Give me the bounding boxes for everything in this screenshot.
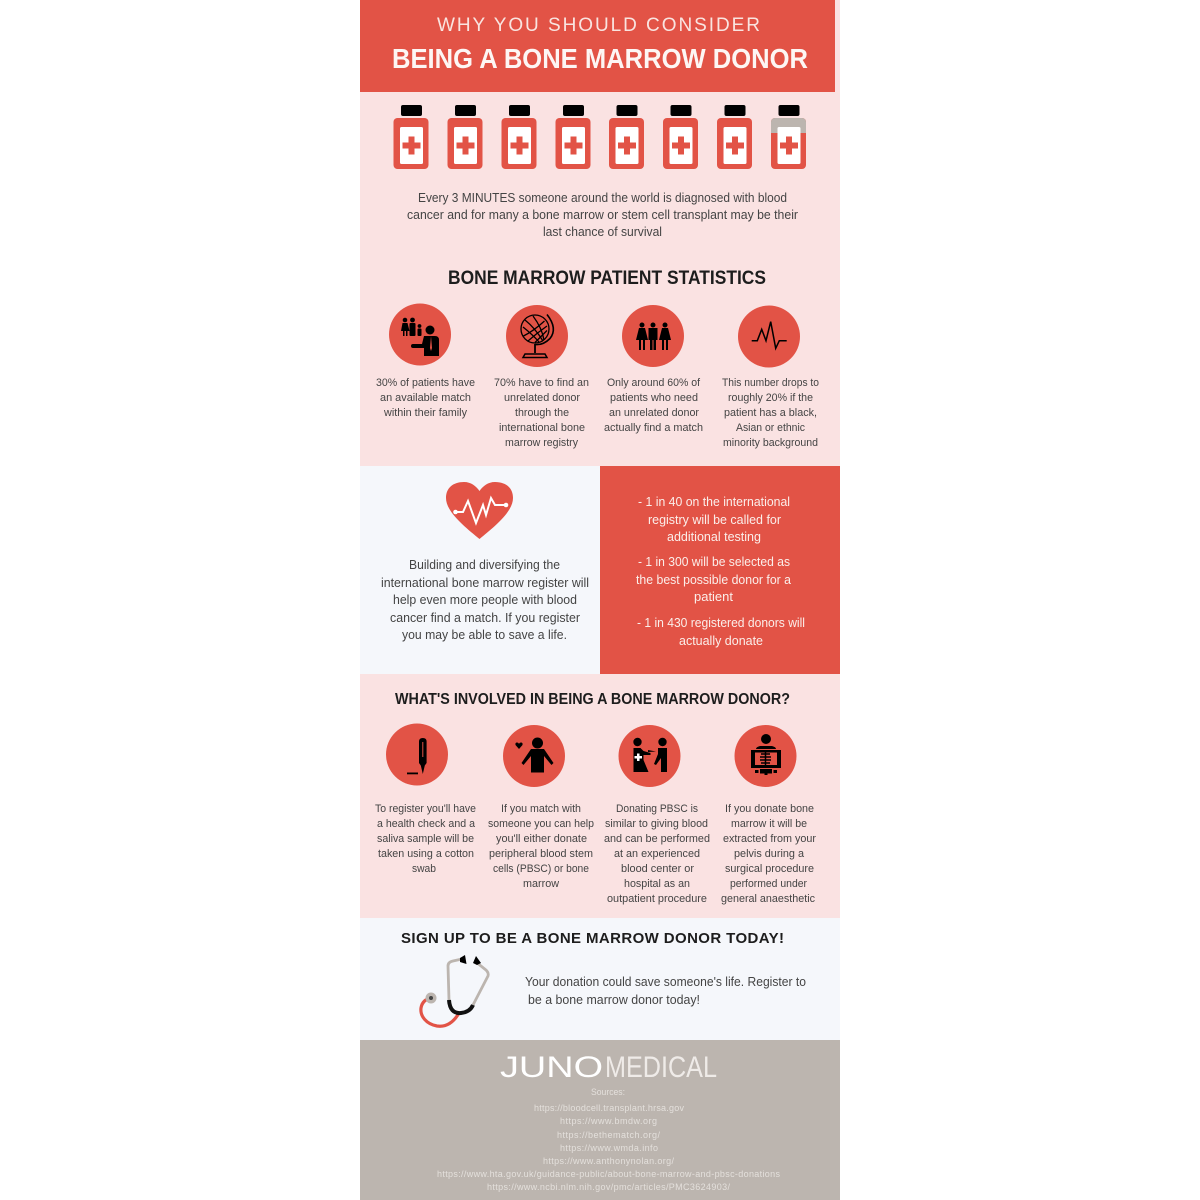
text: donating bone marrow: pelvis during a [734,848,805,860]
icon: doctor and patient [618,725,680,787]
text: family match statistic: 30% of patients have [376,377,475,389]
text block: sources: https://www.ncbi.nlm.nih.gov/pmc/articles/PMC3624903/ [487,1182,730,1192]
text: 60 percent statistic: an unrelated donor [609,407,699,419]
text: registering: saliva sample will be [377,833,474,845]
heading: sign up: SIGN UP TO BE A BONE MARROW DONOR TODAY! [401,930,784,947]
text block: sources: Sources: [591,1087,625,1097]
text: donating bone marrow: surgical procedure [725,863,814,875]
text: 20 percent statistic: Asian or ethnic [736,422,805,434]
text block: registry odds: - 1 in 430 registered donors will [637,615,805,630]
icon: pulse line [738,306,800,368]
text: 20 percent statistic: roughly 20% if the [728,392,813,404]
text block: sources: https://bloodcell.transplant.hrsa.gov [534,1103,684,1113]
text: unrelated donor statistic: unrelated donor [504,392,580,404]
text block: diversifying the register: you may be able to save a life. [402,627,567,642]
heading: what's involved: WHAT'S INVOLVED IN BEING A BONE MARROW DONOR? [395,691,790,708]
text block: intro: last chance of survival [543,224,662,239]
text: 60 percent statistic: actually find a match [604,422,703,434]
text: registering [375,803,476,875]
text: donating PBSC [604,803,710,905]
text block: diversifying the register: Building and diversifying the [409,557,560,572]
icon: three people [622,305,684,367]
text: unrelated donor statistic: through the [515,407,569,419]
text block: diversifying the register: cancer find a match. If you register [390,610,581,625]
text block: call to action: be a bone marrow donor today! [528,992,700,1007]
text block: sources: https://www.bmdw.org [560,1116,657,1126]
text block: registry odds: the best possible donor for a [636,572,792,587]
text block: sources [437,1087,780,1192]
text: 60 percent statistic: patients who need [610,392,698,404]
text block: intro [407,190,799,239]
icon row: eight blood bottles [394,105,806,169]
logo: Juno Medical: MEDICAL [605,1051,717,1084]
text: matching: marrow [523,878,559,890]
text block: sources: https://bethematch.org/ [557,1130,660,1140]
heading: patient statistics: BONE MARROW PATIENT STATISTICS [448,268,766,289]
text: registering: To register you'll have [375,803,476,815]
text block: call to action: Your donation could save someone's life. Register to [525,974,806,989]
logo: Juno Medical [500,1051,717,1084]
text block: registry odds: - 1 in 40 on the international [638,494,790,509]
text: donating bone marrow: If you donate bone [725,803,814,815]
text: donating PBSC: similar to giving blood [605,818,708,830]
icon: x-ray [734,725,796,787]
text: donating bone marrow: performed under [730,878,807,890]
icon: pen [386,724,448,786]
text: matching: If you match with [501,803,581,815]
text: family match statistic [376,377,475,419]
text: 20 percent statistic: minority background [723,437,818,449]
text: unrelated donor statistic: 70% have to find an [494,377,589,389]
text: donating PBSC: and can be performed [604,833,710,845]
text: donating PBSC: hospital as an [624,878,690,890]
text block: registry odds: - 1 in 300 will be selected as [638,554,790,569]
text: donating bone marrow: marrow it will be [731,818,807,830]
text: donating PBSC: at an experienced [614,848,700,860]
text: unrelated donor statistic [494,377,589,449]
text block: sources: https://www.wmda.info [560,1143,658,1153]
text block: registry odds: registry will be called for [648,512,782,527]
text block: diversifying the register [381,557,589,642]
title: first line: WHY YOU SHOULD CONSIDER [437,15,760,36]
text: matching: you'll either donate [496,833,587,845]
text block: registry odds: patient [694,589,733,604]
text block: sources: https://www.hta.gov.uk/guidance-public/about-bone-marrow-and-pbsc-donations [437,1169,780,1179]
text block: diversifying the register: help even more people with blood [393,592,577,607]
text block: registry odds [636,494,805,648]
icon: heart with pulse [446,482,513,539]
text: donating bone marrow [721,803,816,905]
text block: diversifying the register: international bone marrow register will [381,575,589,590]
text: 20 percent statistic [722,377,819,449]
text: family match statistic: within their family [383,407,467,419]
title: second line: BEING A BONE MARROW DONOR [392,43,808,74]
text: unrelated donor statistic: marrow registry [505,437,578,449]
icon: globe [506,305,568,367]
text: donating PBSC: blood center or [621,863,694,875]
text: matching: someone you can help [488,818,594,830]
text: donating PBSC: outpatient procedure [607,893,707,905]
text: donating bone marrow: extracted from your [723,833,816,845]
text block: call to action [525,974,806,1007]
text block: registry odds: actually donate [679,633,763,648]
text: donating PBSC: Donating PBSC is [616,803,698,815]
text block: registry odds: additional testing [667,529,761,544]
text: matching: peripheral blood stem [489,848,593,860]
text: registering: a health check and a [377,818,476,830]
text: registering: swab [412,863,436,875]
icon: stethoscope [421,955,488,1026]
text: family match statistic: an available match [380,392,471,404]
panel: page sections background [360,0,840,1200]
icon: family and doctor [389,304,451,366]
text: 20 percent statistic: patient has a black, [724,407,817,419]
text: matching: cells (PBSC) or bone [493,863,589,875]
text: donating bone marrow: general anaesthetic [721,893,815,905]
logo: Juno Medical: JUNO [500,1051,603,1084]
panel: title banner [360,0,835,92]
text: 60 percent statistic: Only around 60% of [607,377,701,389]
text: matching [488,803,594,890]
text block: intro: Every 3 MINUTES someone around the world is diagnosed with blood [418,190,787,205]
text block: sources: https://www.anthonynolan.org/ [543,1156,674,1166]
text: unrelated donor statistic: international bone [499,422,585,434]
text: 20 percent statistic: This number drops to [722,377,819,389]
icon: child with heart [503,725,565,787]
text: registering: taken using a cotton [378,848,474,860]
text: 60 percent statistic [604,377,703,434]
text block: intro: cancer and for many a bone marrow or stem cell transplant may be their [407,207,799,222]
